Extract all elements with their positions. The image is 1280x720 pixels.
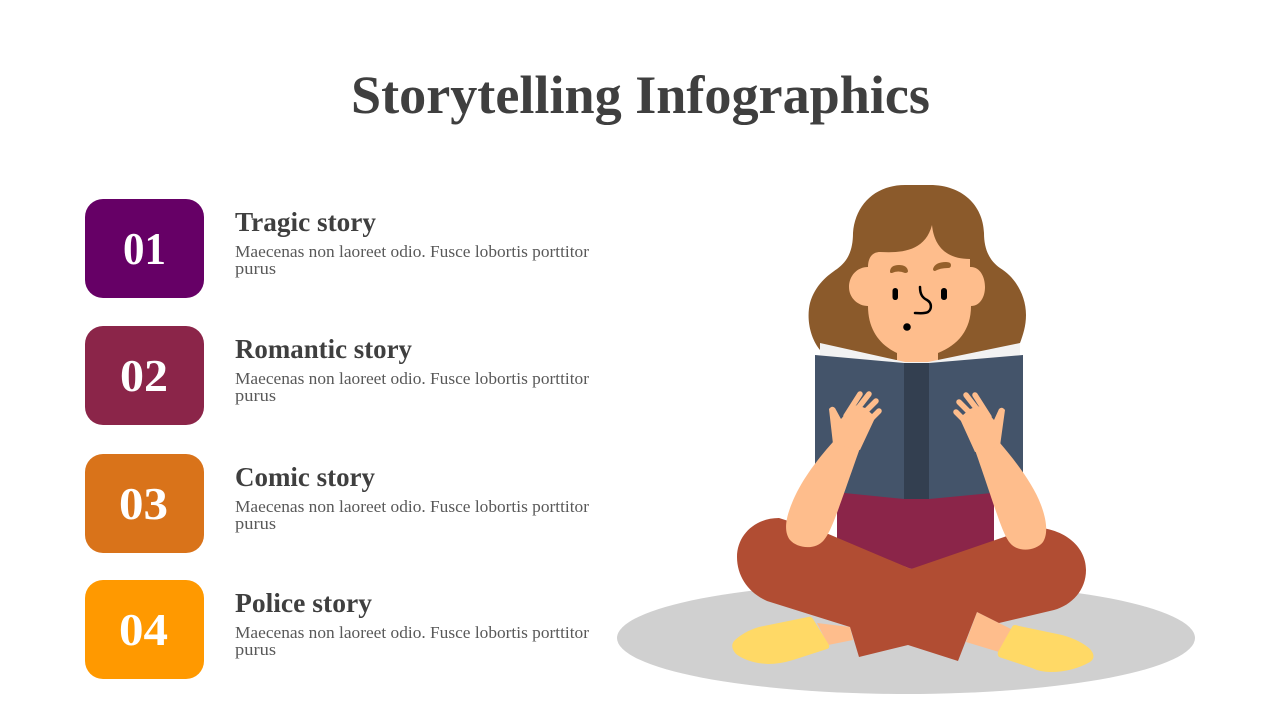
book pages xyxy=(820,343,1020,364)
badge 01: 01 xyxy=(123,223,166,274)
description 03: Maecenas non laoreet odio. Fusce lobortis porttitor xyxy=(235,497,589,516)
description 01 xyxy=(235,242,589,278)
crossed legs xyxy=(737,518,1086,661)
left arm and hand xyxy=(786,394,879,547)
left shoe xyxy=(732,617,829,664)
badge 01 xyxy=(85,199,204,298)
description 02 xyxy=(235,369,589,405)
shirt xyxy=(837,485,994,569)
badge 02 xyxy=(85,326,204,425)
badge 03 xyxy=(85,454,204,553)
nose xyxy=(915,287,931,313)
heading: tragic story: Tragic story xyxy=(235,207,376,237)
badge 04 xyxy=(85,580,204,679)
right shoe xyxy=(998,625,1094,672)
hair xyxy=(809,185,1026,360)
illustration: girl reading a book xyxy=(617,185,1195,694)
heading: comic story: Comic story xyxy=(235,462,375,492)
item 02: romantic story xyxy=(85,326,589,425)
eyebrows xyxy=(890,262,951,273)
book spine xyxy=(904,363,929,499)
book cover xyxy=(815,355,1023,499)
description 03: purus xyxy=(235,514,276,533)
description 04 xyxy=(235,623,589,659)
badge 02: 02 xyxy=(120,350,168,401)
item 03: comic story xyxy=(85,454,589,553)
heading: police story: Police story xyxy=(235,588,373,618)
description 01: Maecenas non laoreet odio. Fusce lobortis porttitor xyxy=(235,242,589,261)
description 04: Maecenas non laoreet odio. Fusce lobortis porttitor xyxy=(235,623,589,642)
title: Storytelling Infographics xyxy=(351,65,930,125)
item 01: tragic story xyxy=(85,199,589,298)
description 03 xyxy=(235,497,589,533)
heading: romantic story: Romantic story xyxy=(235,334,412,364)
book xyxy=(815,343,1023,499)
badge 03: 03 xyxy=(119,478,168,529)
description 02: Maecenas non laoreet odio. Fusce lobortis porttitor xyxy=(235,369,589,388)
badge 04: 04 xyxy=(119,604,168,655)
eyes xyxy=(892,288,947,300)
right arm and hand xyxy=(956,395,1046,550)
item 04: police story xyxy=(85,580,589,679)
description 04: purus xyxy=(235,640,276,659)
ankles xyxy=(817,612,1013,652)
mouth xyxy=(903,323,911,331)
description 01: purus xyxy=(235,259,276,278)
floor shadow ellipse xyxy=(617,582,1195,694)
description 02: purus xyxy=(235,386,276,405)
face with ears and neck xyxy=(849,225,985,365)
